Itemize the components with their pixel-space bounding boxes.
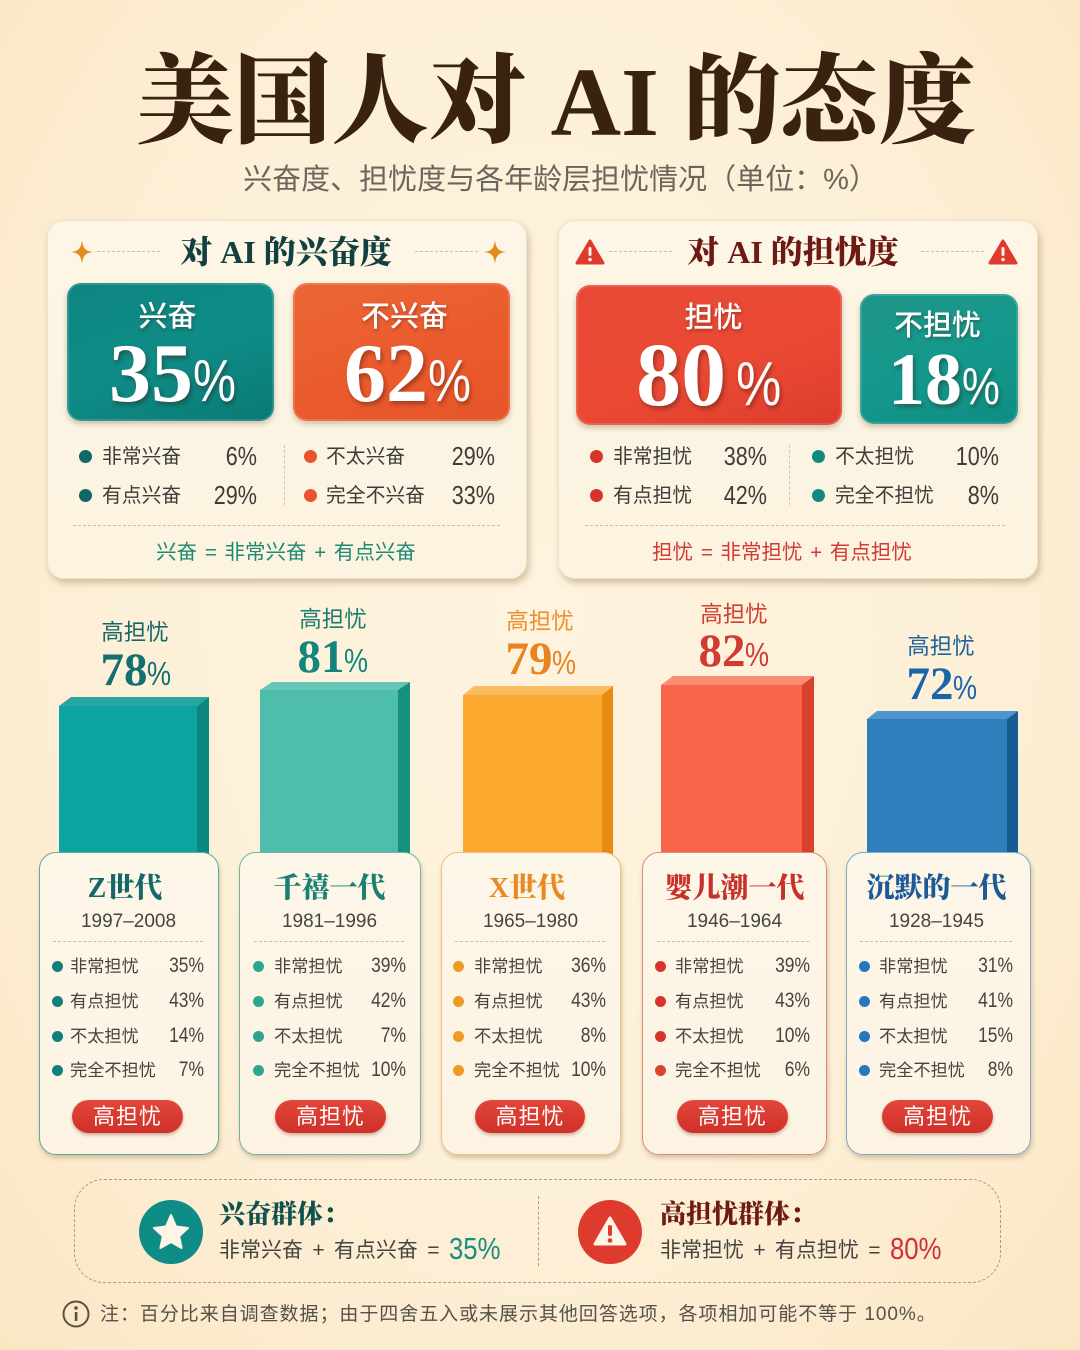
bar: Gen Z: [59, 697, 209, 854]
birth years: 1997–2008: [81, 911, 176, 932]
bar: Boomers: [661, 676, 814, 852]
badge: 高担忧: [296, 1104, 365, 1129]
rows: 不太担忧: [879, 1026, 948, 1046]
rows: [453, 954, 606, 1081]
rows: 10%: [571, 1058, 606, 1081]
legend: excited: 非常兴奋: [102, 446, 181, 468]
legend: not excited: 29%: [452, 441, 495, 471]
bar group: Gen Z: [59, 620, 209, 854]
generation name: 千禧一代: [273, 873, 386, 904]
value: 35: [109, 327, 193, 420]
value: [344, 327, 473, 420]
birth years: 1965–1980: [483, 911, 578, 932]
bar group: Gen X: [463, 609, 613, 854]
rows: 39%: [775, 954, 810, 977]
value: [636, 326, 784, 425]
bar value: Gen Z: %: [147, 655, 172, 692]
legend: not worried: 不太担忧: [835, 446, 914, 468]
rows: 43%: [169, 989, 204, 1012]
bar value: Gen Z: 78: [100, 644, 147, 696]
icon: warning: [578, 1200, 642, 1264]
rows: 完全不担忧: [879, 1060, 965, 1080]
legend: excited: 6%: [226, 441, 257, 471]
card: Boomers: [642, 852, 827, 1155]
rows: 10%: [371, 1058, 406, 1081]
stat box: not worried 18%: [860, 294, 1018, 424]
bar label: Gen X: 高担忧: [506, 609, 574, 634]
bar value: Gen X: %: [552, 644, 577, 681]
panel heading: excitement: 对 AI 的兴奋度: [180, 234, 392, 270]
generation name: 沉默的一代: [866, 873, 1006, 904]
summary: excited group: [219, 1200, 500, 1266]
bar: Millennials: [260, 682, 410, 854]
rows: 7%: [179, 1058, 204, 1081]
generation name: Z世代: [88, 873, 162, 904]
rows: 39%: [371, 954, 406, 977]
badge: 高担忧: [93, 1104, 162, 1129]
note text: 注：百分比来自调查数据；由于四舍五入或未展示其他回答选项，各项相加可能不等于 100%。: [100, 1304, 937, 1325]
legend: not worried: 完全不担忧: [835, 485, 934, 507]
rows: 不太担忧: [474, 1026, 543, 1046]
rows: 非常担忧: [274, 956, 343, 976]
value: 62: [344, 327, 428, 420]
legend: worried: 38%: [724, 441, 767, 471]
value: [109, 327, 238, 420]
rows: 完全不担忧: [474, 1060, 560, 1080]
legend: excited: 29%: [214, 480, 257, 510]
bar value: Millennials: %: [344, 642, 369, 679]
bar group: Millennials: [260, 607, 410, 854]
card: Millennials: [239, 852, 421, 1155]
heading: 高担忧群体：: [660, 1200, 816, 1229]
label: 担忧: [684, 294, 742, 336]
bar group: Boomers: [661, 602, 814, 852]
icon: left warning: [576, 239, 605, 264]
bar value: Boomers: %: [745, 636, 770, 673]
legend: worried: 非常担忧: [613, 446, 692, 468]
formula: 80%: [890, 1231, 941, 1266]
rows: [253, 954, 406, 1081]
value: 80: [636, 326, 726, 425]
rows: 完全不担忧: [675, 1060, 761, 1080]
bar value: Gen X: 79: [505, 633, 552, 685]
rows: 6%: [785, 1058, 810, 1081]
badge: 高担忧: [698, 1104, 767, 1129]
icon: star: [139, 1200, 203, 1264]
rows: 10%: [775, 1024, 810, 1047]
bar value: Gen X: [505, 633, 577, 685]
bar value: Millennials: [297, 631, 369, 683]
value: [888, 339, 1002, 421]
bar value: Silent: %: [953, 669, 978, 706]
rows: 完全不担忧: [70, 1060, 156, 1080]
formula: [660, 1231, 941, 1266]
formula: 非常兴奋 + 有点兴奋 =: [219, 1239, 440, 1262]
generation name: 婴儿潮一代: [664, 873, 804, 904]
rows: [655, 954, 810, 1081]
value: %: [193, 348, 236, 414]
icon: right sparkle: [484, 240, 506, 264]
rows: [52, 954, 204, 1081]
legend: not excited: 33%: [452, 480, 495, 510]
rows: 非常担忧: [474, 956, 543, 976]
rows: [859, 954, 1013, 1081]
heading: 兴奋群体：: [219, 1200, 349, 1229]
formula: 非常担忧 + 有点担忧 =: [660, 1239, 881, 1262]
panel: excitement: [47, 220, 527, 579]
bar value: Silent: [906, 658, 978, 710]
bar label: Gen Z: 高担忧: [101, 620, 169, 645]
panel: summary: [74, 1179, 1001, 1283]
legend: excited: 有点兴奋: [102, 485, 181, 507]
panel heading: worry: 对 AI 的担忧度: [687, 234, 899, 270]
rows: 7%: [381, 1024, 406, 1047]
legend: not worried: 10%: [956, 441, 999, 471]
bar group: Silent: [867, 634, 1018, 852]
value: %: [736, 350, 782, 419]
bar: Gen X: [463, 686, 613, 854]
rows: 8%: [988, 1058, 1013, 1081]
bar label: Millennials: 高担忧: [299, 607, 367, 632]
birth years: 1946–1964: [687, 911, 782, 932]
rows: 43%: [571, 989, 606, 1012]
legend: not excited: 不太兴奋: [326, 446, 405, 468]
icon: info: [62, 1300, 90, 1328]
rows: 31%: [978, 954, 1013, 977]
legend: not worried: 8%: [968, 480, 999, 510]
badge: 高担忧: [903, 1104, 972, 1129]
formula: excited: 兴奋 = 非常兴奋 + 有点兴奋: [156, 541, 416, 564]
rows: 不太担忧: [274, 1026, 343, 1046]
panel: worry: [558, 220, 1038, 579]
note: [62, 1300, 937, 1328]
legend: worried: [590, 441, 767, 510]
badge: [882, 1100, 993, 1133]
rows: 43%: [775, 989, 810, 1012]
badge: 高担忧: [495, 1104, 564, 1129]
stat box: not excited 62%: [293, 283, 510, 421]
value: 18: [888, 339, 962, 421]
card: Gen X: [441, 852, 621, 1155]
legend: not excited: 完全不兴奋: [326, 485, 425, 507]
formula: [219, 1231, 500, 1266]
rows: 有点担忧: [474, 991, 543, 1011]
legend: worried: 有点担忧: [613, 485, 692, 507]
title: 美国人对 AI 的态度: [136, 49, 976, 157]
bar value: Boomers: 82: [698, 625, 745, 677]
summary: worried group: [660, 1200, 941, 1266]
stat box: excited 35%: [67, 283, 274, 421]
rows: 15%: [978, 1024, 1013, 1047]
rows: 有点担忧: [879, 991, 948, 1011]
rows: 完全不担忧: [274, 1060, 360, 1080]
label: 兴奋: [138, 293, 196, 335]
rows: 非常担忧: [70, 956, 139, 976]
formula: 35%: [449, 1231, 500, 1266]
badge: [275, 1100, 386, 1133]
formula: worried: 担忧 = 非常担忧 + 有点担忧: [652, 541, 912, 564]
icon: left sparkle: [71, 240, 93, 264]
rows: 36%: [571, 954, 606, 977]
rows: 有点担忧: [675, 991, 744, 1011]
rows: 有点担忧: [274, 991, 343, 1011]
legend: worried: 42%: [724, 480, 767, 510]
badge: [72, 1100, 183, 1133]
rows: 不太担忧: [70, 1026, 139, 1046]
stat box: worried 80%: [576, 285, 842, 425]
rows: 14%: [169, 1024, 204, 1047]
rows: 有点担忧: [70, 991, 139, 1011]
bar label: Silent: 高担忧: [907, 634, 975, 659]
legend: not excited: [304, 441, 495, 510]
bar chart: worry by generation: [38, 602, 1034, 1160]
badge: [677, 1100, 788, 1133]
value: %: [428, 348, 471, 414]
bar label: Boomers: 高担忧: [700, 602, 768, 627]
bar value: Gen Z: [100, 644, 172, 696]
subtitle: 兴奋度、担忧度与各年龄层担忧情况（单位：%）: [243, 164, 878, 196]
rows: 非常担忧: [879, 956, 948, 976]
rows: 不太担忧: [675, 1026, 744, 1046]
bar: Silent: [867, 711, 1018, 852]
birth years: 1981–1996: [282, 911, 377, 932]
birth years: 1928–1945: [889, 911, 984, 932]
rows: 8%: [581, 1024, 606, 1047]
generation name: X世代: [489, 873, 565, 904]
rows: 非常担忧: [675, 956, 744, 976]
rows: 42%: [371, 989, 406, 1012]
card: Gen Z: [39, 852, 219, 1155]
value: %: [962, 358, 1000, 416]
legend: not worried: [812, 441, 999, 510]
legend: excited: [79, 441, 257, 510]
label: 不兴奋: [361, 293, 448, 335]
rows: 35%: [169, 954, 204, 977]
badge: [475, 1100, 585, 1133]
icon: right warning: [988, 239, 1018, 264]
bar value: Millennials: 81: [297, 631, 344, 683]
label: 不担忧: [894, 302, 981, 344]
bar value: Silent: 72: [906, 658, 953, 710]
card: Silent: [846, 852, 1031, 1155]
rows: 41%: [978, 989, 1013, 1012]
bar value: Boomers: [698, 625, 770, 677]
